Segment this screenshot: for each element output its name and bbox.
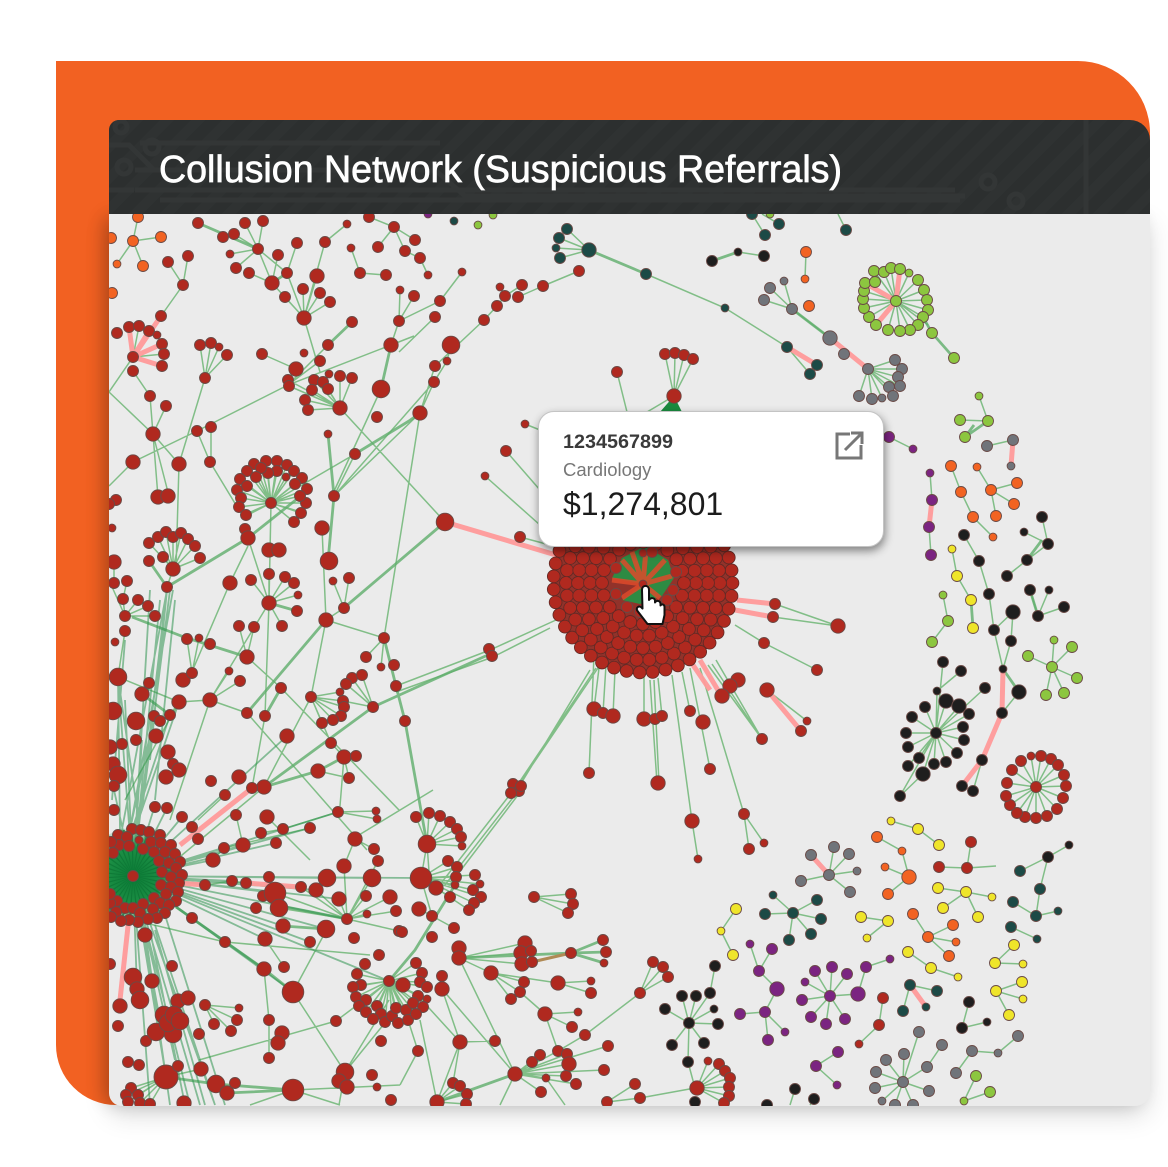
nodes: black right side with star — [894, 512, 1070, 802]
nodes: small top items — [424, 214, 774, 230]
large hub green star — [109, 828, 174, 918]
nodes: red upper left — [104, 212, 698, 542]
nodes: red lower middle — [396, 808, 736, 1110]
nodes: bottom orange — [872, 832, 960, 962]
amount: $1,274,801 — [563, 486, 723, 522]
network graph — [109, 214, 1083, 1106]
title: Collusion Network (Suspicious Referrals) — [159, 149, 842, 191]
ring cluster 2 — [348, 958, 432, 1028]
central dense cluster — [546, 547, 740, 680]
nodes: gray top — [758, 277, 1018, 470]
panel body background — [109, 214, 1150, 1106]
nodes: teal top — [450, 208, 852, 380]
large hub ring cluster — [104, 802, 204, 942]
nodes: yellow right side — [948, 545, 978, 634]
nodes: bottom right yellow — [717, 817, 1028, 1020]
nodes: bottom purple — [734, 940, 894, 1089]
cluster: red ring right — [1000, 750, 1072, 824]
nodes: orange top right — [800, 246, 814, 312]
icon: open in new — [836, 432, 864, 460]
nodes: bottom black — [660, 841, 1073, 1110]
thin edges — [109, 214, 1077, 1105]
nodes: green right side — [926, 392, 1082, 700]
nodes: red lower left — [104, 806, 404, 1110]
header bar with circuit pattern and title — [109, 120, 1150, 214]
specialty: Cardiology — [563, 459, 651, 480]
provider id: 1234567899 — [563, 431, 673, 453]
nodes: red middle left — [103, 521, 527, 800]
cluster: orange top left — [106, 212, 166, 298]
thick edges — [132, 223, 1042, 1102]
pink suspicious edges — [120, 269, 1013, 1007]
nodes: bottom right gray — [796, 842, 1024, 1110]
ring cluster 1 — [232, 456, 312, 528]
nodes: orange right side — [946, 460, 1022, 541]
nodes: black top — [706, 248, 770, 266]
nodes: bottom right teal — [760, 866, 1062, 1016]
cone under top cluster — [661, 402, 682, 411]
nodes: purple right side — [884, 432, 938, 560]
nodes: red around central cluster — [584, 598, 976, 1048]
dense green bundles from the large hub at left — [110, 587, 421, 1105]
nodes: bottom lime — [960, 1070, 996, 1105]
tooltip card — [538, 411, 884, 547]
icon: hand cursor — [636, 584, 666, 625]
cluster: lime green ring — [858, 262, 960, 364]
